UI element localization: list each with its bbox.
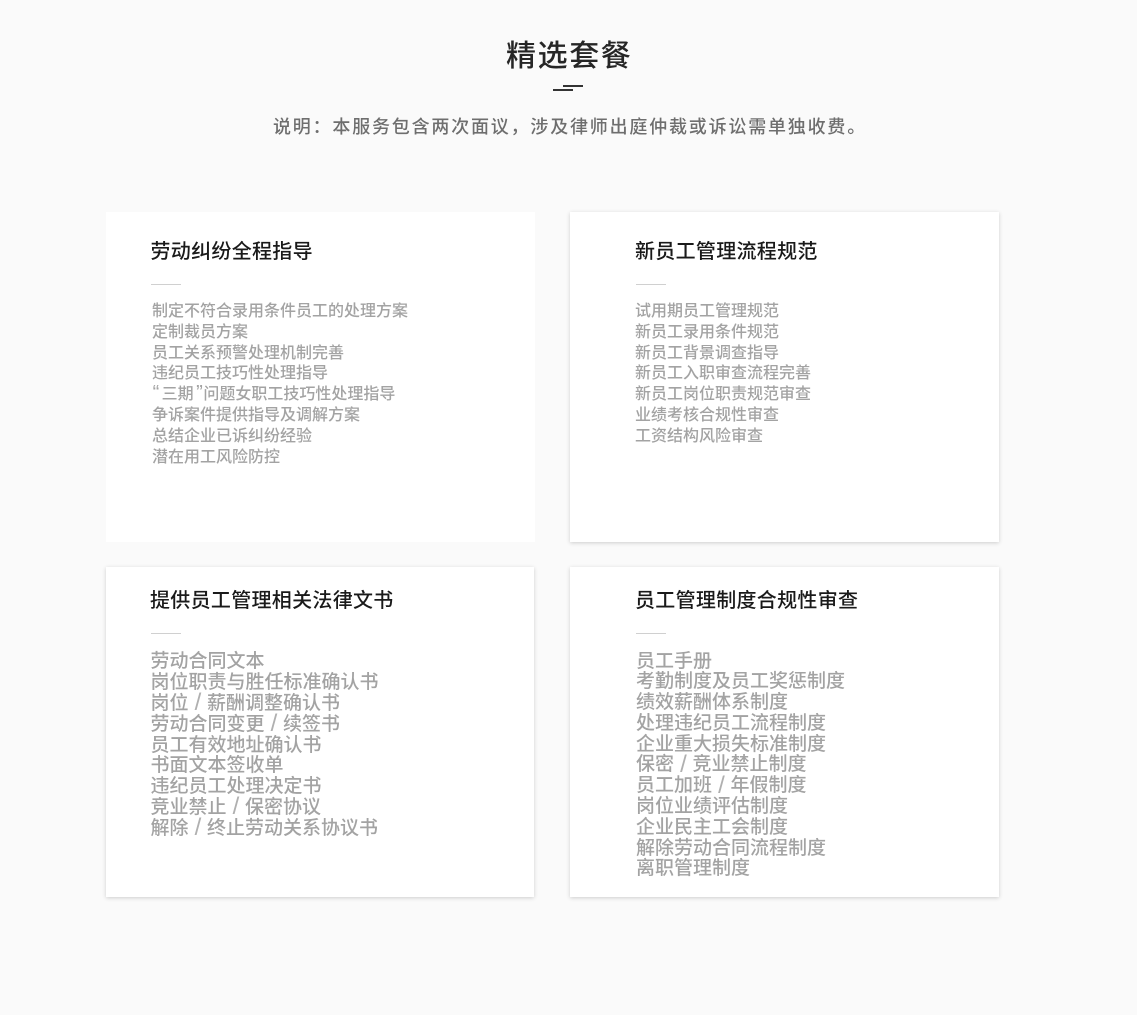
item list: 定制裁员方案 [152,324,248,341]
item list: 新员工岗位职责规范审查 [635,386,811,403]
item list: 员工加班 / 年假制度 [636,772,807,799]
item list: 岗位职责与胜任标准确认书 [150,672,379,693]
item list: 新员工入职审查流程完善 [635,365,811,382]
panel heading: 提供员工管理相关法律文书 [150,590,394,612]
item list: 制定不符合录用条件员工的处理方案 [152,303,408,320]
item list [635,302,811,445]
item list: 员工有效地址确认书 [150,735,322,756]
item list: 潜在用工风险防控 [152,449,280,466]
item list: 绩效薪酬体系制度 [636,692,788,713]
item list: 岗位业绩评估制度 [636,796,788,817]
item list: 岗位 / 薪酬调整确认书 [150,689,340,716]
item list: 业绩考核合规性审查 [635,407,779,424]
item list: 争诉案件提供指导及调解方案 [152,407,360,424]
item list: 企业重大损失标准制度 [636,734,826,755]
item list: 新员工录用条件规范 [635,324,779,341]
item list: 工资结构风险审查 [635,428,763,445]
item list [636,650,845,879]
panel heading: 新员工管理流程规范 [635,241,818,263]
item list [150,650,379,841]
item list: 劳动合同文本 [150,651,265,672]
title: 精选套餐 [506,40,632,73]
panel heading: 员工管理制度合规性审查 [635,590,858,612]
item list: 企业民主工会制度 [636,817,788,838]
panel: labor dispute guidance [106,212,535,542]
item list: 书面文本签收单 [150,755,284,776]
subtitle note: 说明：本服务包含两次面议，涉及律师出庭仲裁或诉讼需单独收费。 [273,117,867,137]
item list: 解除 / 终止劳动关系协议书 [150,814,378,841]
item list: 试用期员工管理规范 [635,303,779,320]
item list: “三期”问题女职工技巧性处理指导 [153,382,395,404]
item list [152,302,408,466]
item list: 新员工背景调查指导 [635,345,779,362]
item list: 离职管理制度 [636,858,750,879]
item list: 劳动合同变更 / 续签书 [150,710,340,737]
item list: 员工手册 [636,650,712,672]
item list: 解除劳动合同流程制度 [636,838,826,859]
item list: 违纪员工处理决定书 [150,776,322,797]
title ornament [553,85,583,91]
item list: 考勤制度及员工奖惩制度 [636,671,845,692]
panel heading: 劳动纠纷全程指导 [150,241,313,263]
panel: new employee management [570,212,999,542]
item list: 员工关系预警处理机制完善 [152,345,344,362]
item list: 保密 / 竞业禁止制度 [636,751,807,778]
panel: legal documents [106,567,534,897]
item list: 总结企业已诉纠纷经验 [152,428,312,445]
item list: 处理违纪员工流程制度 [636,713,826,734]
item list: 竞业禁止 / 保密协议 [150,793,321,820]
item list: 违纪员工技巧性处理指导 [152,365,328,382]
panel: compliance review [570,567,999,897]
